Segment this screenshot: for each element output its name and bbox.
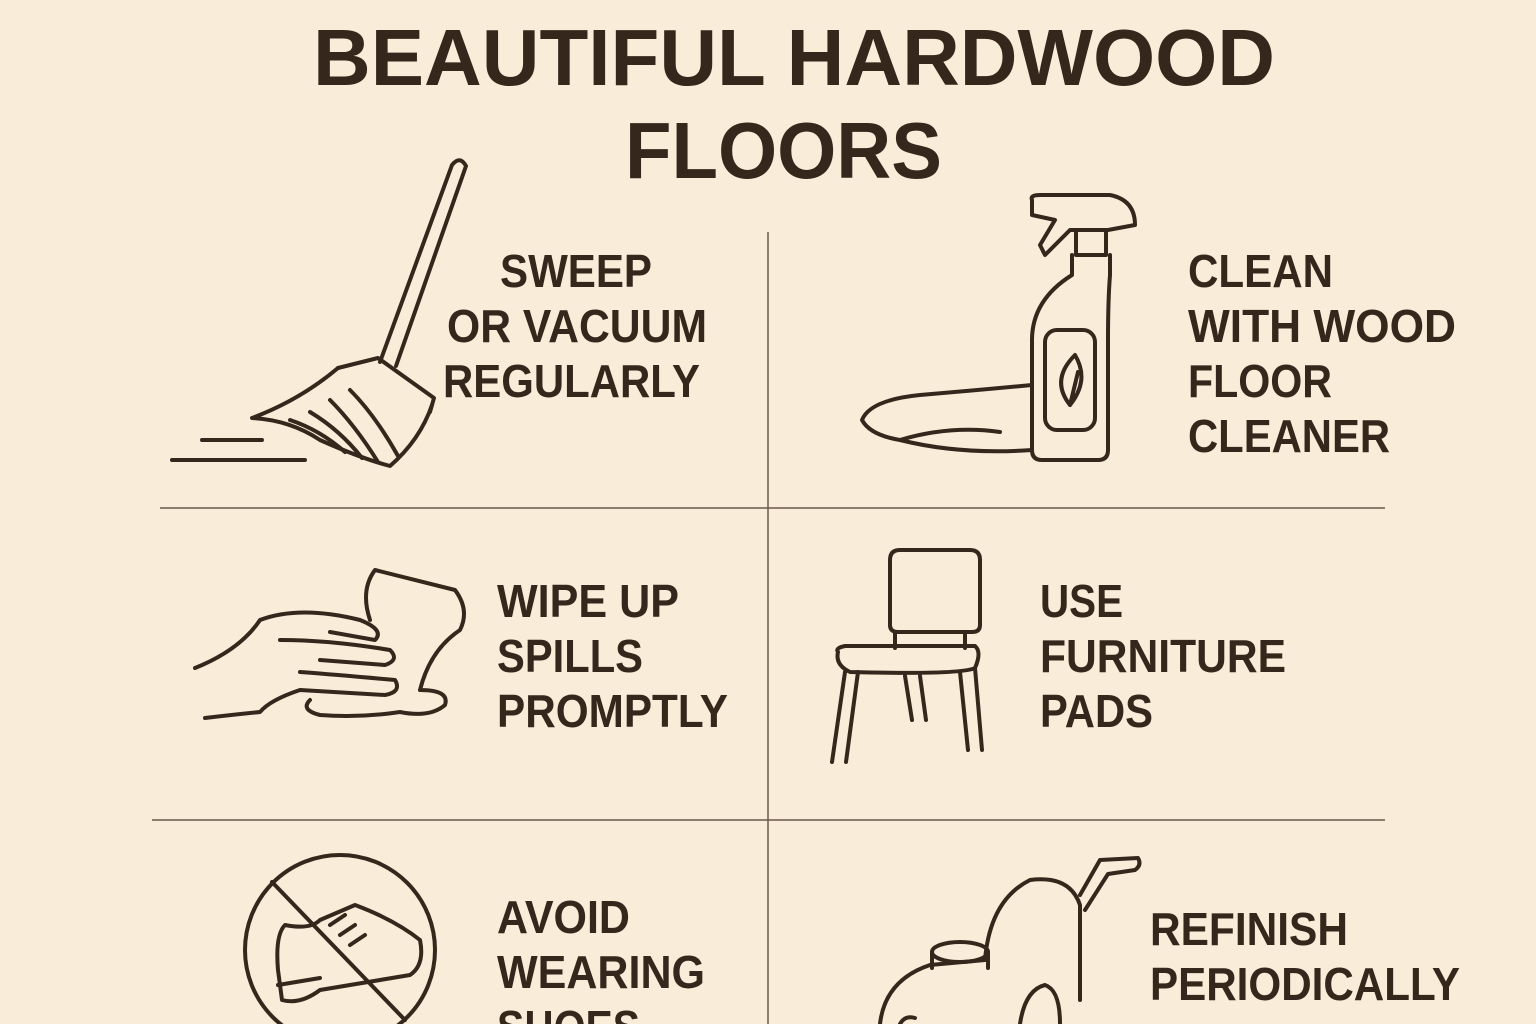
text: clean: WITH WOOD	[1188, 300, 1456, 352]
text: shoes: WEARING	[497, 946, 705, 998]
text: wipe	[497, 575, 728, 737]
text: wipe: SPILLS	[497, 630, 643, 682]
title: BEAUTIFUL HARDWOOD	[313, 13, 1275, 102]
text: pads: PADS	[1040, 685, 1153, 737]
text: clean: FLOOR	[1188, 355, 1332, 407]
icon: broom	[172, 160, 466, 466]
text: refinish: REFINISH	[1150, 903, 1348, 955]
text: sweep: REGULARLY	[443, 355, 700, 407]
icon: spray bottle and cloth	[862, 195, 1135, 460]
text: clean	[1188, 245, 1456, 462]
icon: chair	[832, 550, 982, 762]
text: clean: CLEAN	[1188, 245, 1333, 297]
text: pads	[1040, 575, 1286, 737]
title: FLOORS	[625, 106, 942, 195]
text: sweep: SWEEP	[500, 245, 652, 297]
text: pads: FURNITURE	[1040, 630, 1286, 682]
text: shoes	[497, 891, 705, 1024]
text: sweep	[443, 245, 707, 407]
text: wipe: PROMPTLY	[497, 685, 728, 737]
text: wipe: WIPE UP	[497, 575, 679, 627]
icon: no shoes	[245, 855, 435, 1024]
icon: floor sander	[880, 858, 1139, 1024]
text: sweep: OR VACUUM	[447, 300, 707, 352]
text: pads: USE	[1040, 575, 1123, 627]
title	[313, 13, 1275, 195]
text: shoes: AVOID	[497, 891, 630, 943]
text: refinish	[1150, 903, 1460, 1010]
text: clean: CLEANER	[1188, 410, 1390, 462]
icon: hand wiping	[195, 570, 464, 718]
text: refinish: PERIODICALLY	[1150, 958, 1460, 1010]
